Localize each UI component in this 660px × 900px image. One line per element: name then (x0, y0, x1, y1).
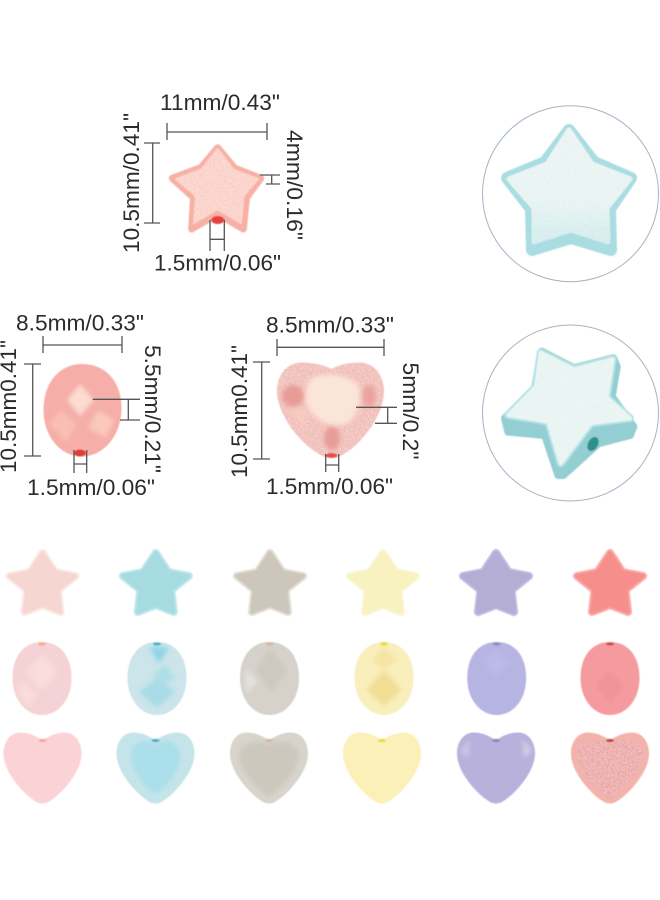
dimension: width 8.5mm: 8.5mm/0.33" (16, 310, 144, 336)
dimension: height 10.5mm: 10.5mm/0.41" (119, 113, 144, 253)
dimension: thickness 5.5mm (93, 345, 165, 473)
dimension: thickness 5.5mm: 5.5mm/0.21" (140, 345, 165, 473)
icon: red star (577, 553, 643, 612)
panel: circle with blue star front view (482, 106, 658, 282)
icon: yellow oval (354, 642, 414, 715)
icon: red oval (580, 642, 640, 715)
icon: grey star (237, 553, 303, 612)
icon: pink heart (4, 732, 82, 804)
dimension: hole 1.5mm (27, 450, 155, 500)
icon: yellow heart (343, 732, 421, 804)
dimension: width 8.5mm (16, 310, 144, 353)
dimension: hole 1.5mm (154, 220, 281, 276)
dimension: hole 1.5mm (266, 454, 393, 499)
panel: heart bead with dimensions (227, 312, 423, 499)
icon: red heart (571, 732, 649, 804)
panel: oval bead with dimensions (0, 310, 165, 500)
panel: colour assortment grid (4, 553, 649, 804)
icon: blue heart (116, 732, 194, 804)
dimension: height 10.5mm (0, 340, 41, 473)
dimension: width 11mm (160, 90, 280, 140)
icon: grey oval (240, 642, 299, 715)
panel: circle with blue star angled view (482, 325, 658, 501)
icon: pink oval (12, 642, 72, 715)
dimension: thickness 4mm (260, 130, 307, 240)
dimension: width 8.5mm (266, 312, 394, 356)
icon: purple star (463, 553, 529, 612)
icon: grey heart (230, 732, 308, 804)
icon: purple heart (457, 732, 535, 804)
icon: blue star front (507, 130, 631, 250)
icon: pink star bead (172, 148, 261, 229)
icon: pink oval bead (44, 364, 122, 456)
dimension: height 10.5mm (119, 113, 160, 253)
dimension: hole 1.5mm: 1.5mm/0.06" (266, 474, 393, 499)
icon: pink heart bead (277, 362, 384, 458)
dimension: thickness 5mm: 5mm/0.2" (398, 362, 423, 460)
dimension: hole 1.5mm: 1.5mm/0.06" (154, 250, 281, 276)
icon: blue oval (128, 642, 186, 715)
dimension: width 8.5mm: 8.5mm/0.33" (266, 312, 394, 338)
panel: star bead with dimensions (119, 90, 307, 276)
dimension: height 10.5mm: 10.5mm0.41" (227, 345, 252, 478)
icon: blue star angled (505, 352, 633, 475)
dimension: thickness 5mm (356, 362, 423, 460)
icon: yellow star (350, 553, 416, 612)
icon: pink star (10, 553, 76, 612)
dimension: hole 1.5mm: 1.5mm/0.06" (27, 475, 155, 500)
icon: purple oval (467, 642, 526, 715)
icon: blue star (123, 553, 189, 612)
dimension: height 10.5mm (227, 345, 270, 478)
dimension: thickness 4mm: 4mm/0.16" (282, 130, 307, 240)
dimension: width 11mm: 11mm/0.43" (160, 90, 280, 115)
